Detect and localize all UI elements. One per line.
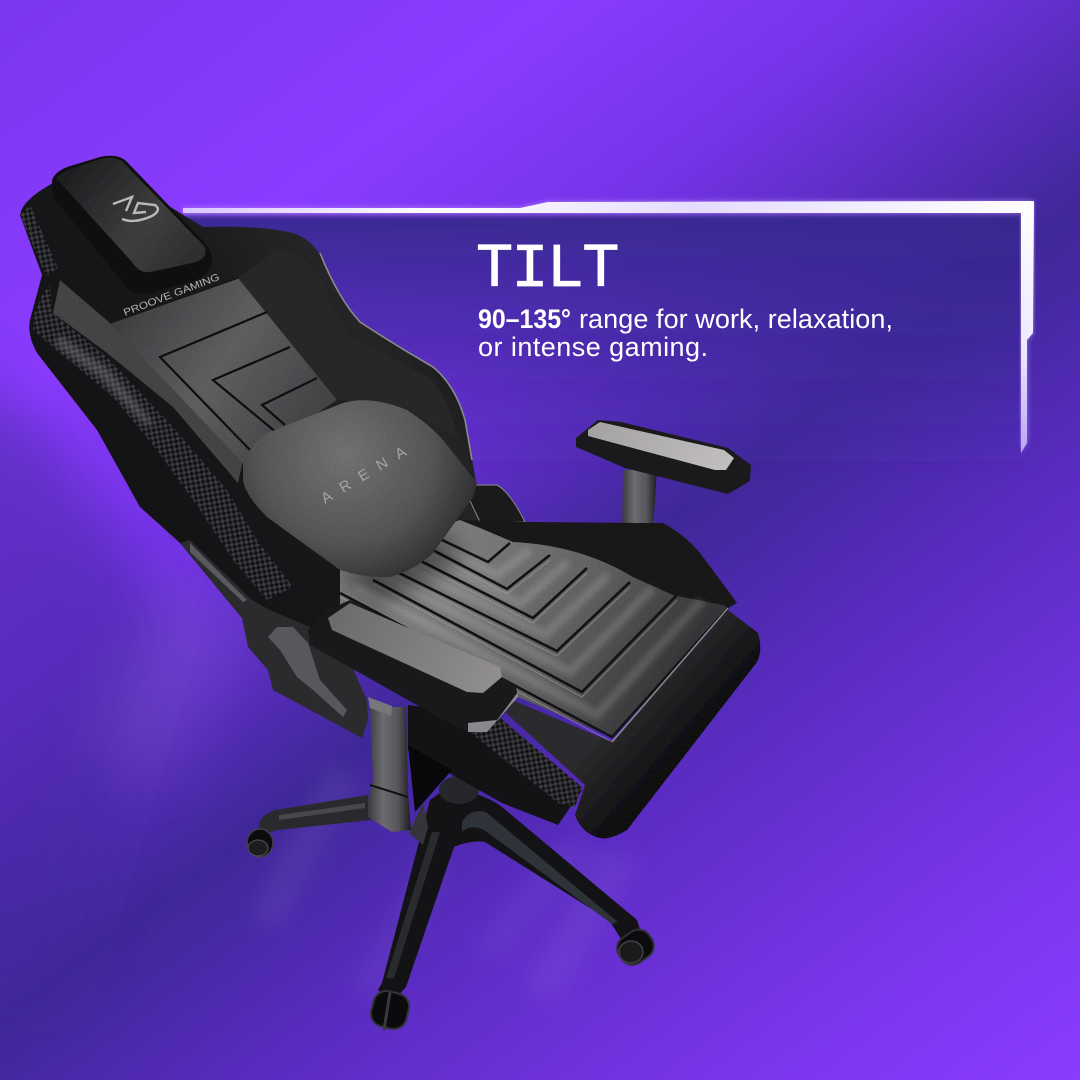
seat front highlight edge [612,608,728,742]
lower carbon side band [33,285,293,600]
title: TILT [476,234,618,305]
far seat bolster [460,520,737,608]
backrest centre pad [110,272,337,463]
chair [20,156,760,1032]
hinge bracket [180,540,368,738]
description text: or intense gaming. [478,332,708,362]
glowing frame outline [183,201,1034,453]
star base with casters [247,776,659,1032]
near armrest [308,600,518,732]
backrest bolster [53,280,243,483]
near armrest post [368,697,411,832]
far seat wing [465,485,525,522]
motion streaks behind chair [90,560,640,1000]
plate highlight [190,543,247,602]
seat front roll [506,610,760,838]
ring highlights [356,542,702,715]
logo mark [113,197,158,221]
headrest [52,156,212,294]
brand text: PROOVE GAMING [122,272,222,319]
top carbon strip [20,205,58,276]
description text: range for work, relaxation, [579,304,893,334]
description text [478,304,893,362]
seat cushion top [340,520,737,742]
description text: 90–135° [478,304,571,334]
wing edge [320,253,472,460]
right bolster texture [238,250,458,440]
carbon sheen [55,335,155,425]
seat underside and carbon side [408,705,582,845]
left side darkening [0,320,170,1000]
lumbar pillow: ARENA [318,443,409,507]
frame interior shadow [185,214,1024,500]
lumbar cast shadow [340,530,465,605]
lumbar pillow [243,400,477,577]
far armrest [576,420,751,530]
hinge arm [268,627,347,717]
backrest shell [20,170,520,640]
